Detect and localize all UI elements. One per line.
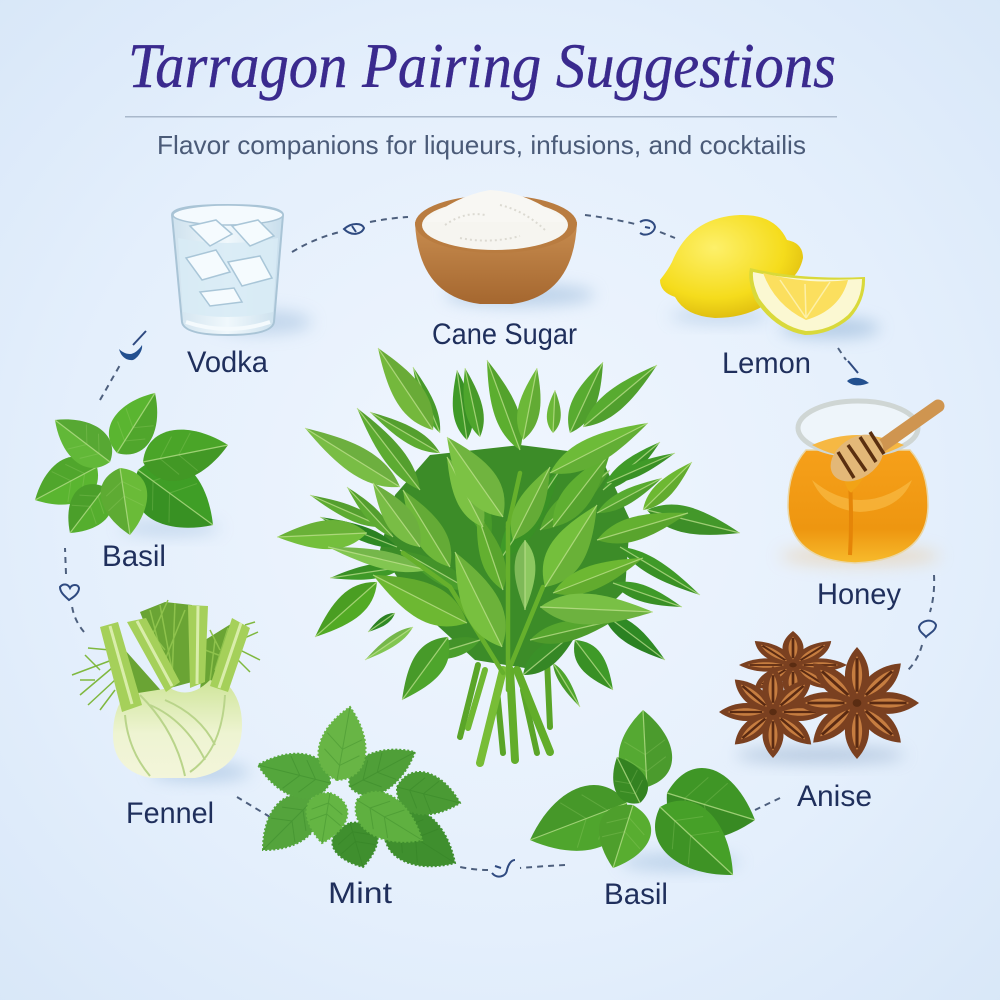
fennel stalks: [100, 605, 250, 712]
illustration: wooden bowl of cane sugar: [415, 190, 595, 306]
connectors: dashed ring with small icons: [60, 215, 936, 877]
honey dipper: [822, 406, 938, 491]
illustration: honey jar with dipper: [780, 401, 940, 566]
label: Basil (left): Basil: [102, 540, 166, 573]
label: Honey: Honey: [817, 578, 901, 611]
label: Fennel: Fennel: [126, 797, 214, 830]
illustration: basil bottom right: [519, 709, 765, 897]
illustration: basil left: [24, 382, 233, 551]
fennel bulb body: [113, 680, 242, 778]
label: Cane Sugar: Cane Sugar: [432, 318, 577, 351]
fennel fronds: [72, 622, 260, 710]
illustration: star anise: [719, 631, 919, 763]
main stem and branches: [403, 473, 543, 690]
front leaves: [515, 540, 535, 610]
label: Lemon: Lemon: [722, 347, 811, 380]
label: Basil (bottom): Basil: [604, 878, 668, 911]
illustration: mint: [247, 702, 469, 885]
label: Mint: Mint: [328, 877, 393, 910]
illustration: fennel bulb: [72, 600, 260, 781]
illustration: lemon and slice: [660, 215, 880, 338]
illustration: glass of vodka with ice: [172, 205, 312, 335]
filler leaves over the mass: [489, 463, 571, 567]
title: Tarragon Pairing Suggestions: [128, 30, 836, 101]
label: Anise: Anise: [797, 780, 872, 813]
subtitle: Flavor companions for liqueurs, infusions, and cocktailis: [157, 130, 806, 160]
illustration: tarragon bunch (center): [276, 340, 743, 763]
back leaves: [317, 510, 400, 554]
middle leaves: [366, 340, 445, 438]
dense foliage mass: [380, 445, 630, 668]
tarragon stems: [460, 660, 550, 763]
label: Vodka: Vodka: [187, 346, 268, 379]
